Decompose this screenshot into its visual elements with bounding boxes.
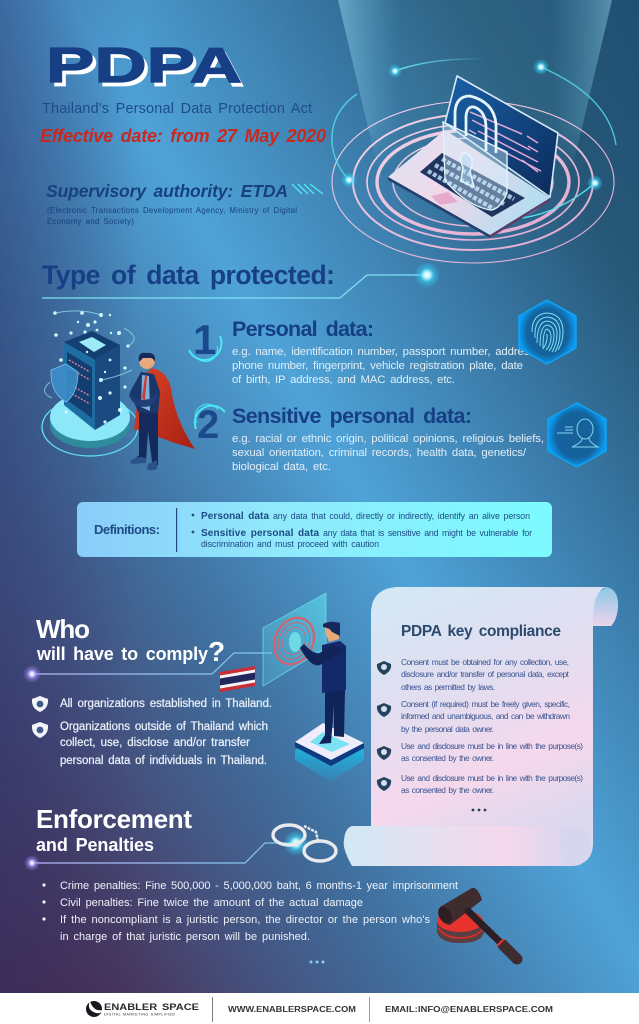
list item: Organizations outside of Thailand which — [60, 721, 268, 733]
list item: All organizations established in Thailand. — [60, 698, 272, 710]
connector line with glow — [42, 262, 440, 298]
compliance item 2: by the personal data owner. — [401, 724, 494, 734]
description: e.g. racial or ethnic origin, political opinions, religious beliefs, — [232, 433, 544, 445]
person arm — [300, 644, 345, 665]
keyboard — [420, 153, 525, 217]
definition 2: any data that is sensitive and might be vulnerable for — [323, 528, 532, 538]
logo text: DIGITAL MARKETING SIMPLIFIED — [104, 1012, 175, 1016]
compliance item 4: as consented by the owner. — [401, 785, 494, 795]
ellipsis dots — [472, 809, 486, 811]
compliance item 3 — [377, 741, 583, 763]
logo text: ENABLER SPACE — [104, 1002, 199, 1013]
person head — [324, 625, 339, 642]
section 1: personal data — [189, 316, 538, 386]
cyan orbit arcs — [332, 59, 616, 218]
compliance item 2 — [377, 699, 570, 734]
description: sexual orientation, criminal records, health data, genetics/ — [232, 447, 527, 459]
light beam — [338, 0, 612, 170]
person legs — [319, 690, 345, 744]
heading: Sensitive personal data: — [232, 404, 472, 428]
compliance item 2: informed and unambiguous, and can be withdrawn — [401, 711, 570, 721]
website: WWW.ENABLERSPACE.COM — [228, 1005, 356, 1014]
compliance item 1: disclosure and/or transfer of personal data, except — [401, 669, 570, 679]
list item — [60, 721, 268, 767]
heading: enforcement and penalties: Enforcement — [36, 804, 192, 834]
heading: Personal data: — [232, 317, 374, 341]
illustration: server and hero — [42, 311, 195, 470]
compliance item 1: others as permitted by laws. — [401, 682, 495, 692]
illustration: person at touch panel — [263, 593, 364, 782]
icon: gavel — [435, 888, 517, 959]
penalty 3: If the noncompliant is a juristic person, the director or the person who's — [60, 914, 430, 926]
penalties list — [42, 880, 458, 943]
subtitle: Thailand's Personal Data Protection Act — [42, 101, 312, 117]
icon: chevron stripes — [292, 184, 323, 194]
illustration: laptop with padlock — [332, 0, 616, 263]
padlock shackle — [455, 96, 496, 153]
definition 1 — [192, 511, 530, 522]
description: e.g. name, identification number, passport number, address, — [232, 346, 538, 358]
compliance item 1: Consent must be obtained for any collection, use, — [401, 657, 569, 667]
icon: handcuffs — [273, 825, 336, 861]
server platform — [42, 398, 138, 456]
scroll heading: PDPA key compliance — [401, 623, 561, 640]
supervisory authority block — [46, 181, 297, 226]
connector line: who — [23, 653, 272, 683]
compliance item 4 — [377, 773, 583, 795]
heading: who will have to comply — [36, 614, 225, 667]
definitions box — [77, 502, 552, 557]
email: EMAIL:INFO@ENABLERSPACE.COM — [385, 1005, 553, 1014]
heading: who will have to comply: will have to comply — [36, 644, 208, 664]
description: phone number, fingerprint, vehicle registration plate, date — [232, 360, 523, 372]
hero head — [139, 353, 155, 369]
concentric rings — [332, 101, 614, 263]
keyhole — [460, 153, 474, 187]
penalty 3 — [42, 914, 431, 943]
heading: enforcement and penalties: and Penalties — [36, 835, 154, 855]
compliance item 1 — [377, 657, 570, 692]
who list — [32, 696, 272, 767]
list item: personal data of individuals in Thailand. — [60, 755, 267, 767]
red target rings — [267, 611, 321, 671]
definition 1: Personal data — [201, 511, 269, 522]
virtual panel — [263, 593, 326, 686]
heading: enforcement and penalties — [36, 804, 192, 855]
title: PDPA wordmark — [46, 39, 245, 97]
numeral 2 with arc: 2 — [197, 403, 219, 447]
logo text — [104, 1002, 199, 1016]
definition 2 — [192, 528, 532, 549]
numeral 1 with arc: 1 — [193, 316, 216, 363]
glowing nodes — [388, 64, 402, 78]
definition 2: discrimination and must proceed with caution — [201, 539, 379, 549]
laptop screen — [445, 76, 558, 197]
hero cape — [134, 368, 195, 449]
orbit strokes — [44, 311, 134, 398]
compliance item 2: Consent (if required) must be freely given, specific, — [401, 699, 570, 709]
description — [232, 433, 544, 473]
shield check bullet — [32, 696, 48, 712]
heading: who will have to comply: ? — [208, 636, 225, 667]
supervisory authority block: Supervisory authority: ETDA — [46, 181, 288, 201]
supervisory authority block: (Electronic Transactions Development Agency, Ministry of Digital — [47, 206, 297, 215]
list item: collect, use, disclose and/or transfer — [60, 737, 250, 749]
hero shoes — [130, 457, 157, 470]
bottom dots — [310, 960, 324, 964]
description: of birth, IP address, and MAC address, etc. — [232, 374, 455, 386]
compliance item 4: Use and disclosure must be in line with the purpose(s) — [401, 773, 583, 783]
compliance item 3: Use and disclosure must be in line with the purpose(s) — [401, 741, 583, 751]
heading: type of data protected: Type of data protected: — [42, 260, 335, 290]
icon: person hexagon — [548, 403, 606, 467]
connector line: enforcement — [24, 830, 309, 871]
definitions label: Definitions: — [94, 522, 160, 537]
definition 1: any data that could, directly or indirectly, identify an alive person — [273, 511, 530, 521]
code lines — [469, 112, 541, 172]
person torso — [322, 641, 346, 693]
heading: who will have to comply: Who — [36, 614, 90, 644]
supervisory authority block: Economy and Society) — [47, 217, 134, 226]
title: PDPA wordmark: PDPA — [50, 43, 245, 97]
shield check bullet — [32, 722, 48, 738]
server tower — [64, 331, 120, 360]
laptop base — [388, 130, 550, 235]
penalty 1: Crime penalties: Fine 500,000 - 5,000,000 baht, 6 months-1 year imprisonment — [60, 880, 458, 892]
hero torso — [130, 372, 160, 414]
padlock body — [443, 122, 507, 210]
platform layers — [295, 730, 364, 782]
hero legs — [131, 408, 158, 469]
footer bar — [0, 993, 639, 1024]
penalty 2: Civil penalties: Fine twice the amount of the actual damage — [60, 897, 363, 909]
compliance item 3: as consented by the owner. — [401, 753, 494, 763]
section 2: sensitive personal data — [195, 403, 544, 473]
description: biological data, etc. — [232, 461, 331, 473]
effective date: Effective date: from 27 May 2020 — [40, 126, 326, 146]
definition 2: Sensitive personal data — [201, 528, 319, 539]
panel: key compliance scroll — [344, 587, 618, 866]
icon: fingerprint hexagon — [519, 300, 576, 364]
touchpad — [431, 192, 458, 205]
title: PDPA wordmark: PDPA — [46, 39, 242, 93]
logo mark — [86, 1001, 103, 1017]
penalty 3: in charge of that juristic person will be punished. — [60, 931, 310, 943]
shield — [51, 364, 78, 402]
data particles — [53, 311, 130, 424]
icon: thai flag — [220, 666, 255, 692]
description — [232, 346, 538, 386]
